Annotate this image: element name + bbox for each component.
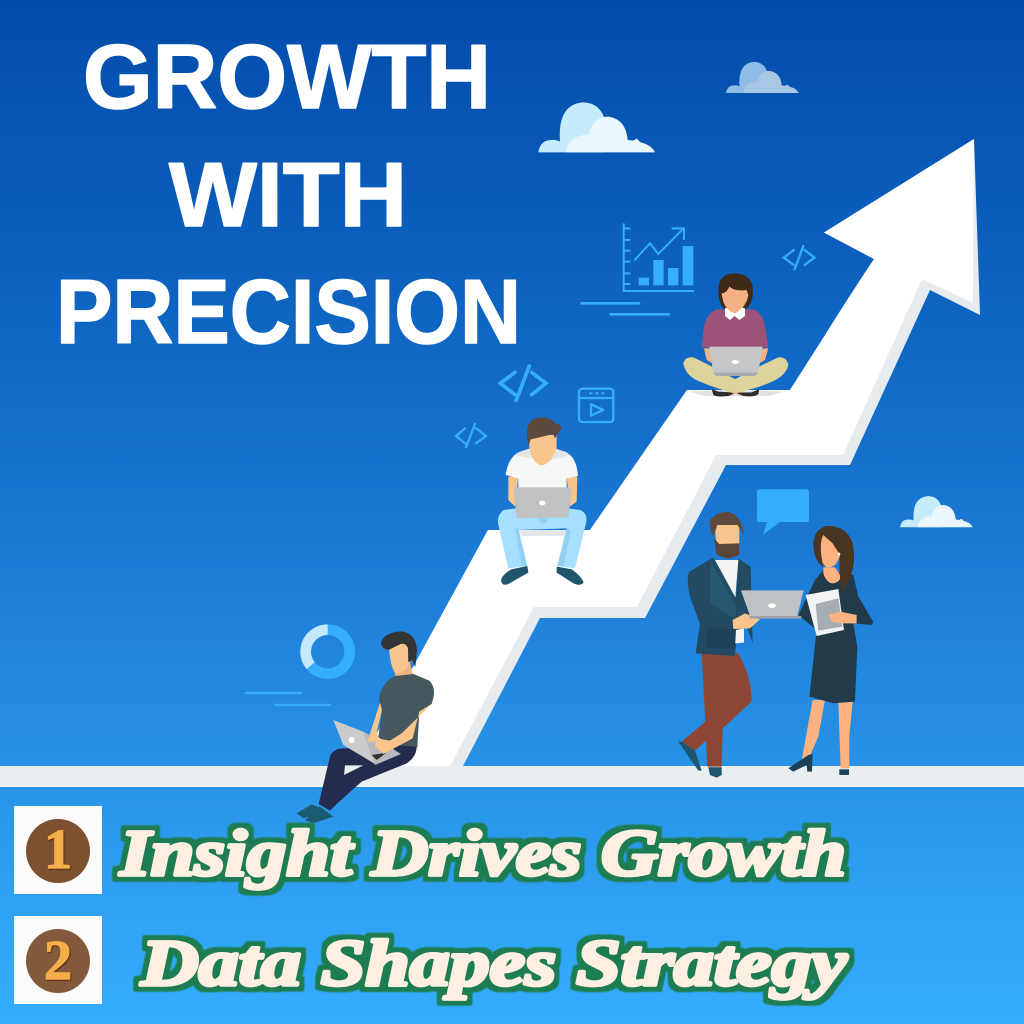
person: woman with tablet <box>788 526 873 775</box>
person: seated on middle step with laptop <box>498 417 586 585</box>
icon: speech bubble <box>757 489 809 534</box>
title: PRECISION <box>56 262 521 363</box>
heading: insight: Insight Drives Growth <box>119 817 846 890</box>
cloud: small right <box>900 496 973 527</box>
icon: code tag small <box>456 424 486 447</box>
title: WITH <box>169 145 407 246</box>
cloud: small top right <box>726 62 799 93</box>
title <box>56 27 521 363</box>
floor <box>0 766 1024 787</box>
cloud: large top <box>538 102 655 152</box>
badge 1: 1 <box>44 819 72 881</box>
person: bearded man with laptop <box>678 512 760 778</box>
badge 2 <box>14 916 102 1004</box>
title: GROWTH <box>83 27 491 128</box>
icon: code tag large <box>500 366 546 401</box>
decorative data lines <box>245 693 331 705</box>
icon: video window <box>579 389 613 422</box>
person: cross-legged on top step with laptop <box>683 273 788 396</box>
badge 2: 2 <box>44 930 72 992</box>
bar chart icon <box>582 223 694 314</box>
badge 1 <box>14 806 102 894</box>
icon: code tag right <box>784 246 814 269</box>
growth arrow <box>359 139 980 766</box>
heading: data: Data Shapes Strategy <box>140 927 848 1000</box>
icon: donut chart <box>306 630 350 674</box>
laptop: shared by the standing pair <box>741 590 804 619</box>
person: seated on floor with laptop <box>297 631 434 823</box>
